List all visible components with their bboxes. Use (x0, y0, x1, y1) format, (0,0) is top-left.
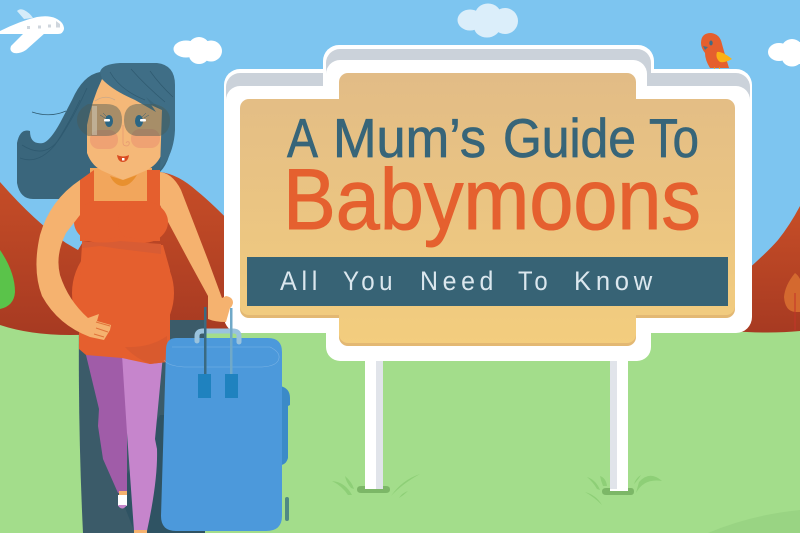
suitcase handle (197, 331, 239, 342)
sunglasses (77, 104, 170, 136)
face (87, 79, 162, 180)
cheeks (90, 129, 160, 149)
grass tufts (332, 474, 662, 505)
banner text: Know (574, 266, 657, 296)
suitcase rods (204, 307, 232, 375)
banner text: You (343, 266, 397, 296)
heading line: Mum’s (333, 107, 486, 169)
heading line: To (649, 107, 699, 169)
icon: cloud left (174, 37, 222, 64)
heading line: A (287, 107, 318, 169)
left mountains (0, 172, 240, 335)
fringe strands (110, 69, 173, 102)
ground (0, 320, 800, 533)
dress band (82, 241, 161, 254)
nose (123, 125, 129, 146)
banner text (280, 266, 657, 296)
sign board (224, 45, 752, 361)
heading line (287, 107, 699, 169)
sign frame (224, 45, 752, 361)
woman (17, 63, 233, 533)
top hair (100, 63, 175, 170)
icon: orange tree right (784, 273, 800, 330)
heading: Babymoons: Babymoons (283, 152, 701, 248)
suitcase tags (198, 374, 238, 398)
eyes (100, 113, 149, 127)
brow (95, 97, 115, 101)
icon: cloud right (768, 39, 800, 66)
icon: green tree left (0, 250, 15, 309)
mouth (117, 155, 129, 162)
suitcase side pocket (280, 386, 290, 465)
banner text: Need (420, 266, 498, 296)
right arm (158, 172, 233, 322)
woman shadow (79, 320, 205, 533)
suitcase wheel mark (285, 497, 289, 521)
sign panel shadow (240, 200, 735, 346)
banner text: All (280, 266, 322, 296)
suitcase (161, 307, 290, 531)
back foot (118, 491, 127, 509)
back hair (17, 72, 173, 199)
left arm (36, 180, 111, 340)
icon: airplane (0, 9, 64, 53)
sign panel (240, 73, 735, 343)
banner text: To (518, 266, 552, 296)
dress (72, 170, 174, 364)
post bases (357, 486, 634, 495)
icon: cloud top (458, 4, 518, 38)
tooth (122, 158, 124, 160)
sign posts (365, 355, 628, 491)
front leg (122, 355, 163, 531)
front foot (134, 530, 147, 533)
dress fold (125, 336, 167, 364)
suitcase body (161, 338, 282, 531)
heading line: Guide (503, 107, 636, 169)
neck shadow (110, 175, 137, 186)
neck chest (90, 168, 152, 208)
right mountain (730, 206, 800, 332)
back leg (86, 350, 127, 493)
banner (247, 257, 728, 306)
icon: bird (701, 33, 732, 69)
hand fingers (94, 322, 110, 337)
suitcase lid line (164, 347, 279, 367)
hair strands (20, 88, 87, 160)
glasses highlight (92, 106, 97, 135)
